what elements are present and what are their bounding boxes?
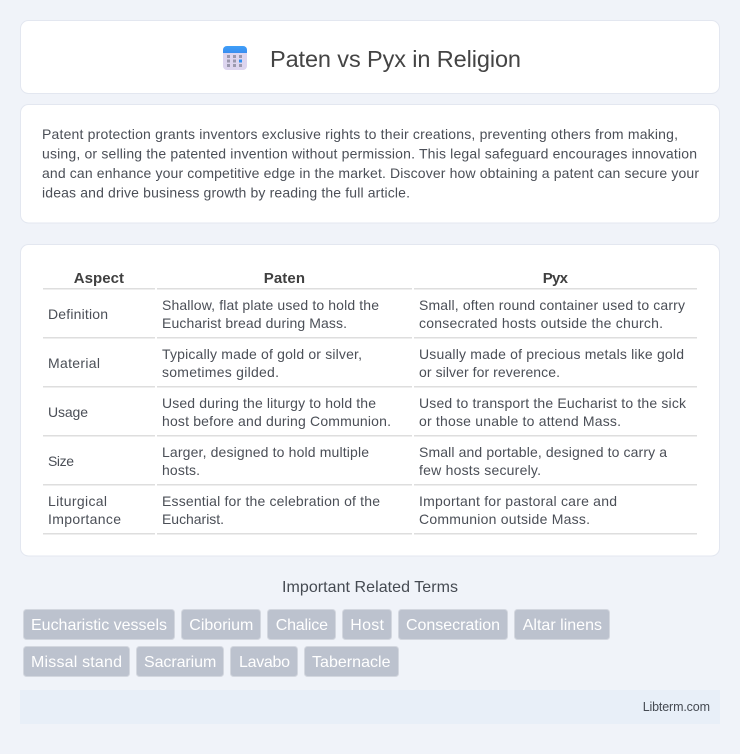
heading: related terms: Important Related Terms xyxy=(282,579,458,596)
table row: Definition: Eucharist bread during Mass. xyxy=(162,315,347,331)
tag: Chalice: Chalice xyxy=(276,617,328,634)
table row: Usage xyxy=(43,395,697,436)
table row: Usage: host before and during Communion. xyxy=(162,413,391,429)
text block: introduction paragraph: Patent protection grants inventors exclusive rights to their creations, preventing others from making, xyxy=(42,126,678,142)
panel: header xyxy=(20,20,720,94)
tag: Missal stand: Missal stand xyxy=(31,654,122,671)
table header row: Paten xyxy=(264,270,305,287)
table row: Liturgical Importance: Importance xyxy=(48,511,121,527)
tag: Lavabo xyxy=(230,646,298,676)
tag: Chalice xyxy=(268,610,336,640)
tag: Eucharistic vessels: Eucharistic vessels xyxy=(31,617,167,634)
footer xyxy=(20,690,720,724)
tag: Consecration: Consecration xyxy=(406,617,500,634)
table row: Definition: Shallow, flat plate used to hold the xyxy=(162,297,379,313)
table row: Size: Larger, designed to hold multiple xyxy=(162,444,369,460)
table row: Size: hosts. xyxy=(162,462,200,478)
table row: Size xyxy=(43,444,697,486)
tag: Altar linens xyxy=(514,610,610,640)
table row: Definition xyxy=(43,297,697,338)
table row: Material: or silver for reverence. xyxy=(419,364,560,380)
tag: Altar linens: Altar linens xyxy=(523,617,602,634)
table row: Liturgical Importance xyxy=(43,493,697,534)
table row: Liturgical Importance: Essential for the celebration of the xyxy=(162,493,380,509)
table row: Definition: consecrated hosts outside the church. xyxy=(419,315,663,331)
tag: Host xyxy=(342,610,392,640)
table row: Material: sometimes gilded. xyxy=(162,364,279,380)
tag: Sacrarium xyxy=(136,646,224,676)
table header row: Pyx xyxy=(543,270,569,287)
text block: introduction paragraph xyxy=(42,126,699,200)
tag: Ciborium xyxy=(182,610,260,640)
table header row xyxy=(43,270,697,290)
table row: Size: Small and portable, designed to carry a xyxy=(419,444,667,460)
text block: introduction paragraph: using, or selling the patented invention without permission. This legal safeguard encourages innovation xyxy=(42,146,697,162)
table row: Usage: Used to transport the Eucharist to the sick xyxy=(419,395,687,411)
table row: Material: Material xyxy=(48,355,100,371)
table row: Definition: Small, often round container used to carry xyxy=(419,297,685,313)
table row: Material xyxy=(43,346,697,388)
footer: Libterm.com xyxy=(643,700,710,714)
tag: Tabernacle: Tabernacle xyxy=(312,654,391,671)
table row: Material: Typically made of gold or silver, xyxy=(162,346,362,362)
tag: Consecration xyxy=(398,610,508,640)
text block: introduction paragraph: and can enhance your competitive edge in the market. Discover how obtaining a patent can secure your xyxy=(42,165,699,181)
table row: Size: Size xyxy=(48,453,74,469)
tag: Lavabo: Lavabo xyxy=(239,654,290,671)
table row: Size: few hosts securely. xyxy=(419,462,541,478)
table row: Usage: Usage xyxy=(48,404,88,420)
table row: Material: Usually made of precious metals like gold xyxy=(419,346,684,362)
panel: comparison table xyxy=(20,244,720,556)
text block: introduction paragraph: ideas and drive business growth by reading the full article. xyxy=(42,184,410,200)
table row: Usage: or those unable to attend Mass. xyxy=(419,413,621,429)
tag: Eucharistic vessels xyxy=(24,610,174,640)
icon: calendar xyxy=(223,46,247,70)
table row: Liturgical Importance: Important for pastoral care and xyxy=(419,493,617,509)
tag: Ciborium: Ciborium xyxy=(189,617,253,634)
table row: Definition: Definition xyxy=(48,306,108,322)
table row: Liturgical Importance: Eucharist. xyxy=(162,511,224,527)
tag: Tabernacle xyxy=(304,646,398,676)
table row: Usage: Used during the liturgy to hold the xyxy=(162,395,376,411)
tag: Host: Host xyxy=(350,617,385,634)
related term tags xyxy=(24,610,610,676)
title: Paten vs Pyx in Religion xyxy=(270,46,521,72)
tag: Sacrarium: Sacrarium xyxy=(144,654,216,671)
table row: Liturgical Importance: Liturgical xyxy=(48,493,107,509)
panel: introduction xyxy=(20,104,720,223)
table header row: Aspect xyxy=(74,270,124,287)
tag: Missal stand xyxy=(24,646,130,676)
table row: Liturgical Importance: Communion outside Mass. xyxy=(419,511,590,527)
